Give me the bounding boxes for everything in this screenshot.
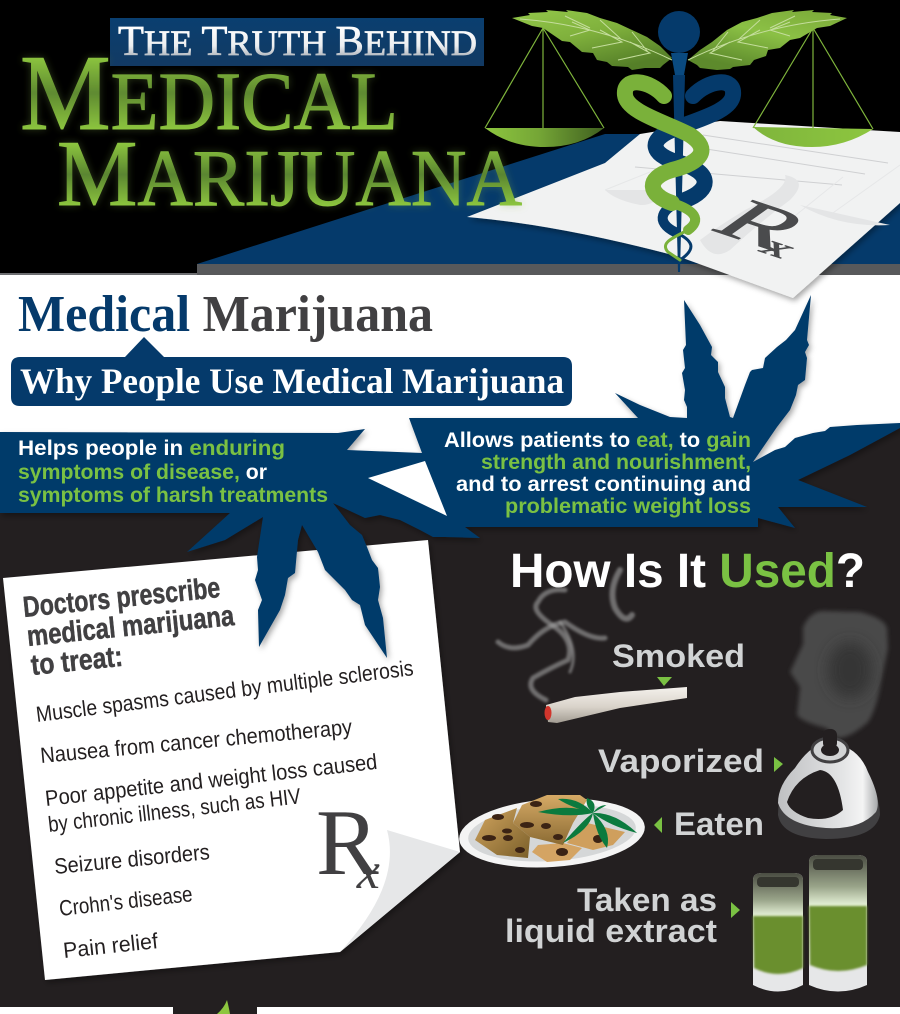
Rx mark on note: R <box>316 791 379 895</box>
note heading <box>21 572 236 682</box>
Rx mark on header paper: x <box>751 232 808 264</box>
icon: plate of cookies <box>457 793 647 873</box>
bottom edge with next-section teaser <box>0 1000 900 1014</box>
note heading: medical marijuana <box>25 600 236 653</box>
heading: Medical Marijuana: Medical Marijuana <box>18 286 433 343</box>
text: allows patients: strength and nourishment, <box>481 451 751 474</box>
icon: right leaf <box>688 10 847 70</box>
prescription paper <box>467 121 900 298</box>
text: allows patients: and to arrest continuing and <box>456 473 751 496</box>
icon: blue snake <box>656 82 733 260</box>
title: Medical: MEDICAL <box>20 34 398 153</box>
callout: why people use medical marijuana <box>11 337 572 406</box>
text: helps people <box>18 437 328 507</box>
text: helps people: symptoms of harsh treatments <box>18 484 328 507</box>
label: eaten: Eaten <box>674 806 764 842</box>
page curl <box>340 830 460 952</box>
text: allows patients <box>444 429 751 518</box>
title banner: The Truth Behind: THE TRUTH BEHIND <box>118 19 477 65</box>
icon: left leaf <box>512 10 672 70</box>
icon: left scale <box>485 28 604 147</box>
text: allows patients: problematic weight loss <box>505 495 751 518</box>
icon: vaporizer <box>778 611 888 839</box>
header background <box>0 0 900 275</box>
text: helps people: symptoms of disease, or <box>18 461 267 484</box>
label: vaporized: Vaporized <box>598 743 764 779</box>
label: taken as liquid extract <box>505 882 740 949</box>
conditions list: Crohn's disease <box>58 881 194 921</box>
panel: doctors note <box>3 540 460 980</box>
conditions list: Nausea from cancer chemotherapy <box>39 714 353 768</box>
icon: joint with smoke <box>498 570 687 723</box>
conditions list <box>35 655 415 963</box>
dark lower background <box>0 426 900 1007</box>
icon: green snake <box>625 82 701 260</box>
conditions list: by chronic illness, such as HIV <box>47 783 302 837</box>
label: taken as liquid extract: liquid extract <box>505 913 717 949</box>
icon: right scale <box>753 28 873 147</box>
conditions list: Seizure disorders <box>53 839 211 879</box>
icon: caduceus staff <box>658 11 700 272</box>
Rx mark on note: x <box>356 843 380 900</box>
note heading: to treat: <box>29 641 124 682</box>
text: helps people: Helps people in enduring <box>18 437 285 460</box>
cannabis leaf with text bands <box>0 295 900 658</box>
note heading: Doctors prescribe <box>21 572 222 624</box>
heading: how is it used: How Is It Used? <box>510 545 865 598</box>
text: allows patients: Allows patients to eat, to gain <box>444 429 751 452</box>
icon: right glass <box>809 855 867 992</box>
conditions list: Muscle spasms caused by multiple sclerosis <box>35 655 415 727</box>
conditions list: Pain relief <box>62 928 160 963</box>
icon: left glass <box>753 873 803 992</box>
label: smoked: Smoked <box>612 638 745 674</box>
Rx mark on header paper: R <box>694 189 831 262</box>
callout: why people use medical marijuana: Why People Use Medical Marijuana <box>20 361 564 401</box>
smoke <box>498 570 632 700</box>
conditions list: Poor appetite and weight loss caused <box>44 749 378 811</box>
label: taken as liquid extract: Taken as <box>577 882 717 918</box>
title: Marijuana: MARIJUANA <box>57 122 522 226</box>
